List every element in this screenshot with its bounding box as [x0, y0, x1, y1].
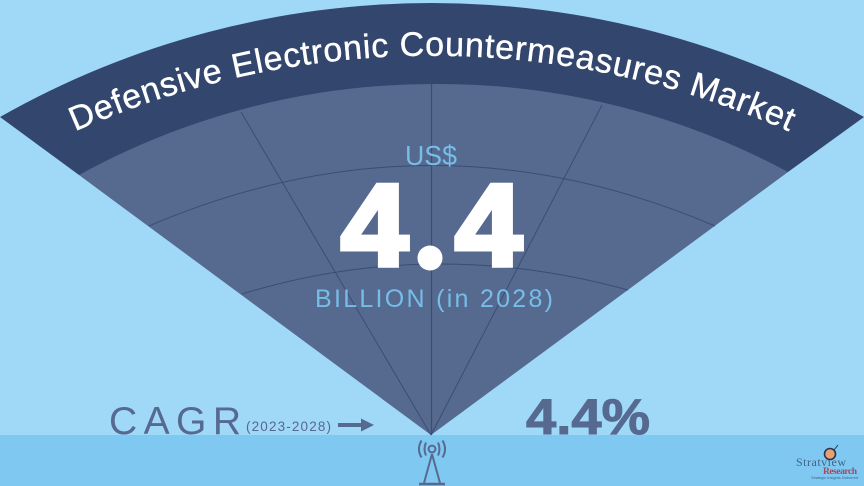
- logo: Stratview Research: [796, 445, 858, 480]
- currency label: US$: [405, 140, 457, 171]
- main value: [341, 160, 522, 290]
- arrow: [338, 418, 374, 432]
- value unit: BILLION (in 2028): [315, 285, 553, 313]
- bottom band: [0, 435, 864, 486]
- icon: radio tower: [419, 440, 445, 484]
- CAGR label: CAGR: [109, 400, 241, 443]
- logo wordmark: Stratview: [796, 455, 846, 469]
- value second digit: 4: [455, 160, 522, 290]
- radar grid: [149, 84, 715, 435]
- CAGR label: [109, 400, 331, 443]
- logo icon: [824, 445, 838, 460]
- main value: 4: [341, 160, 408, 290]
- CAGR period: (2023-2028): [246, 419, 331, 434]
- panel: title arc band: [0, 3, 864, 175]
- title: Defensive Electronic Countermeasures Market: [68, 32, 796, 132]
- logo tagline: Strategic Insights Delivered: [811, 476, 858, 480]
- panel: radar fan: [79, 50, 788, 435]
- value decimal point: .: [426, 249, 432, 271]
- logo subtitle: Research: [823, 467, 858, 477]
- CAGR value: 4.4%: [526, 389, 650, 445]
- value decimal point: [418, 246, 442, 271]
